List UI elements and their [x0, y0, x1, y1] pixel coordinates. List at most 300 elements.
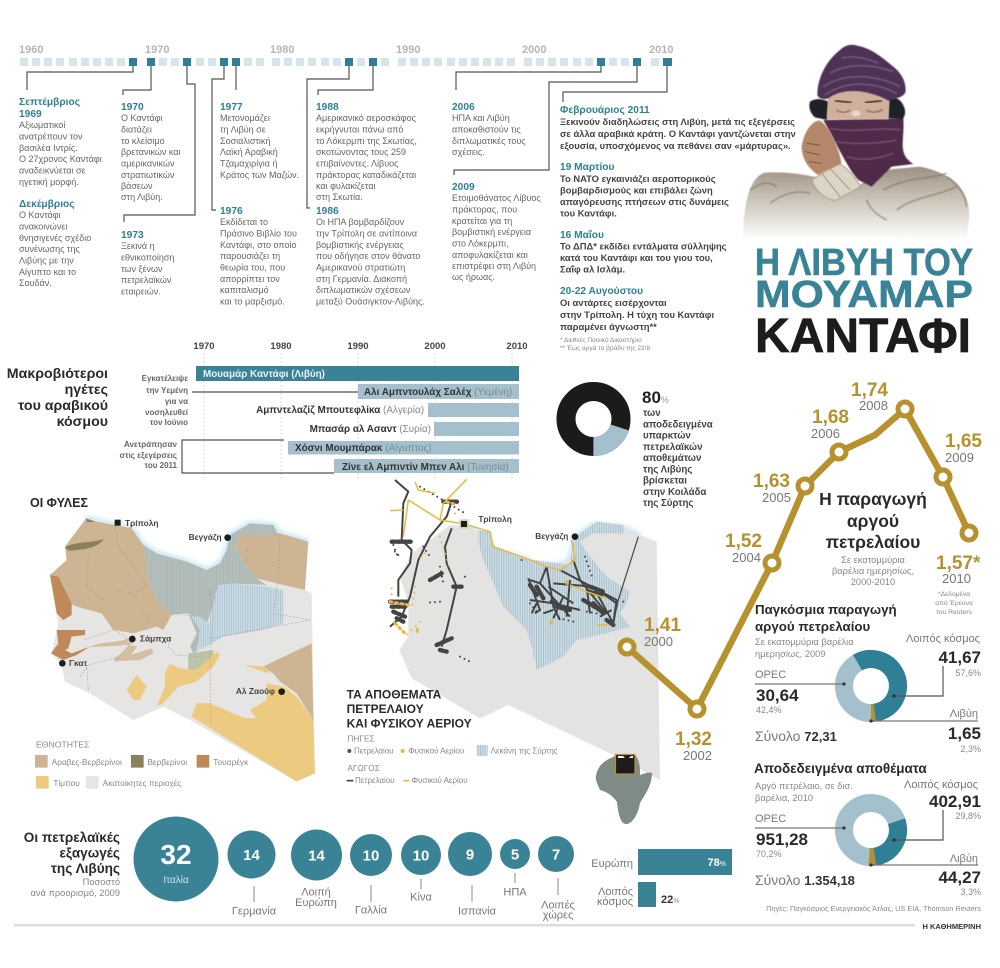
note: overthrown leaders: του 2011 [145, 461, 178, 470]
data label 2002: 1,32 [675, 729, 712, 750]
bar: Europe [591, 849, 732, 875]
production markers [620, 402, 976, 716]
Arab-Berber south-east region [263, 643, 313, 720]
timeline text: 1977: τη Λιβύη σε [220, 124, 266, 134]
timeline year labels: 1960 [19, 44, 43, 56]
bar: Gaddafi [196, 366, 519, 381]
data label 2010: από Έρευνα [935, 599, 973, 607]
timeline text: 1970 [121, 102, 180, 202]
panel: longest-serving Arab leaders [7, 341, 528, 481]
timeline text: 1977: Κράτος των Μαζών. [220, 170, 299, 180]
data label 2000: 2000 [644, 634, 673, 649]
timeline text: 1970: το κλείσιμο [121, 136, 165, 146]
bubble: Italy: Ιταλία [163, 874, 189, 886]
exports heading: Οι πετρελαϊκές [24, 830, 120, 845]
timeline text: 1986 [316, 206, 425, 306]
timeline text: 2009: ως ήρωας. [452, 272, 495, 282]
total: Σύνολο 72,31 [755, 728, 837, 744]
Libya base map [399, 525, 660, 780]
leaders heading: ηγέτες [65, 382, 108, 398]
turban [817, 45, 906, 101]
tribes legend: Τίμπου [53, 778, 80, 788]
bubble: Spain [448, 832, 497, 918]
note: Yemen leader: νοσηλευθεί [145, 408, 188, 417]
bubble: China: Κίνα [410, 892, 432, 904]
timeline text: 2011: 19 Μαρτίου [560, 162, 615, 173]
timeline text: 1973: 1973 [121, 230, 144, 241]
production subtitle: Σε εκατομμύρια [841, 555, 906, 565]
data label 2000 [644, 615, 681, 649]
title: Η ΛΙΒΥΗ ΤΟΥ [755, 242, 973, 284]
timeline text: 1988: εκρήγνυται πάνω από [316, 124, 403, 134]
bubble: other countries [538, 836, 575, 922]
leaders axis years: 2010 [506, 341, 528, 352]
bar: Mubarak: Χόσνι Μουμπάρακ (Αίγυπτος) [295, 443, 432, 454]
hand [802, 121, 842, 175]
timeline text: 1986: στη Γερμανία. Διακοπή [316, 274, 407, 284]
timeline text: 2006: 2006 [452, 102, 475, 113]
data label 2004: 2004 [732, 550, 761, 565]
tribes heading: ΟΙ ΦΥΛΕΣ [30, 496, 88, 510]
bubble: USA: 5 [511, 846, 519, 864]
production heading: πετρελαίου [826, 532, 920, 552]
callout: rest of world: Λοιπός κόσμος [906, 633, 980, 645]
exports heading: της Λιβύης [51, 861, 120, 876]
callout: Libya: 2,3% [960, 744, 981, 754]
reserves legend: Φυσικού Αερίου [408, 747, 464, 756]
donut caption: αποθεμάτων [643, 453, 701, 464]
reserves subtitle: βαρέλια, 2010 [755, 793, 813, 803]
timeline text: 2009 [452, 182, 541, 282]
bubble: Spain: 9 [466, 846, 474, 864]
hatched northern region [132, 523, 278, 653]
data label 2010: του Reuters [936, 609, 972, 616]
timeline text: 1988: πράκτορας καταδικάζεται [316, 170, 416, 180]
bar: Assad [310, 422, 519, 436]
callout: OPEC: 42,4% [756, 705, 782, 715]
timeline year labels: 2000 [522, 44, 546, 56]
callout: OPEC: 30,64 [756, 686, 799, 705]
reserves legend: ΑΓΩΓΟΣ [347, 763, 380, 773]
timeline year squares [20, 58, 659, 66]
bubble: other countries: χώρες [543, 910, 573, 922]
bar: Europe: 78% [708, 857, 726, 869]
timeline text: 2009: στο Λόκερμπι, [452, 238, 509, 248]
timeline text: 1988: Αμερικανικό αεροσκάφος [316, 113, 417, 123]
timeline text: 1986: μεταξύ Ουάσιγκτον-Λιβύης. [316, 296, 425, 306]
reserves legend: Φυσικού Αερίου [412, 776, 468, 785]
reserves legend: ΠΗΓΕΣ [347, 734, 375, 744]
timeline text: 1969: 1969 [19, 109, 42, 120]
callout: OPEC [755, 669, 846, 715]
province borders [80, 527, 310, 723]
timeline text: 1973: Ξεκινά η [121, 241, 155, 251]
bubble: Italy [134, 816, 218, 902]
cuff [812, 163, 861, 201]
timeline text: 1977 [220, 102, 299, 180]
timeline text: 1973: εθνικοποίηση [121, 252, 174, 262]
title [755, 242, 973, 363]
timeline text: 2009: αποφυλακίζεται και [452, 250, 528, 260]
bubble: Germany [228, 830, 277, 918]
timeline text: 1969: Ο 27χρονος Καντάφι [19, 154, 102, 164]
timeline text: 1976: και το μαρξισμό. [220, 296, 285, 306]
panel: proven reserves [754, 761, 981, 913]
oil field clusters [390, 487, 623, 662]
hatched south tip [188, 650, 213, 670]
bar: Europe: Ευρώπη [591, 858, 633, 870]
timeline text: 1988 [316, 102, 417, 202]
timeline text: 1976: Πράσινο Βιβλίο του [220, 228, 297, 238]
gas pipelines [390, 479, 608, 625]
leaders heading: του αραβικού [18, 398, 108, 414]
bar: Mubarak [288, 441, 519, 454]
data label 2000: 1,41 [644, 615, 681, 636]
callout: Libya: 1,65 [948, 724, 981, 743]
timeline text: 1969: ανατρέπουν τον [19, 132, 83, 142]
data label 2002 [675, 729, 712, 763]
data label 2009 [945, 431, 982, 465]
timeline text: 1986: 1986 [316, 206, 339, 217]
panel: world crude production [755, 602, 981, 754]
callout: rest of world: Λοιπός κόσμος [904, 779, 978, 791]
bar: rest of world: Λοιπός [598, 886, 633, 898]
reserves heading: ΚΑΙ ΦΥΣΙΚΟΥ ΑΕΡΙΟΥ [347, 716, 472, 730]
Arab-Berber east region [235, 533, 308, 590]
panel: oil and gas reserves map [347, 479, 660, 785]
callout: OPEC [755, 813, 846, 859]
donut caption: αποδεδειγμένα [643, 420, 713, 430]
timeline text: 2011: Σαΐφ αλ Ισλάμ. [560, 264, 625, 274]
timeline text: 2011: Ξεκινούν διαδηλώσεις στη Λιβύη, μετά τις εξεγέρσεις [560, 116, 795, 127]
timeline year labels: 2010 [649, 44, 673, 56]
donut caption: στην Κοιλάδα [643, 487, 706, 498]
timeline text: 1970: βρετανικών και [121, 147, 180, 157]
data label 2008 [851, 380, 888, 413]
timeline text: 1970: αμερικανικών [121, 158, 175, 168]
timeline axis [19, 44, 673, 222]
timeline text: 1988: σκοτώνοντας τους 259 [316, 147, 406, 157]
bar: Saleh: Αλι Αμπντουλάχ Σαλέχ (Υεμένη) [364, 387, 512, 398]
bubble: France: Γαλλία [355, 904, 388, 916]
leaders axis years: 2000 [424, 341, 446, 352]
donut caption: της Λιβύης [643, 464, 692, 476]
panel: crude oil production line chart [620, 380, 982, 763]
leaders axis years: 1990 [347, 341, 369, 352]
callout: rest of world: 57,6% [955, 668, 981, 678]
world production heading: Παγκόσμια παραγωγή [755, 602, 897, 617]
timeline text: 1977: Σοσιαλιστική [220, 136, 270, 146]
tribes legend: Ακατοίκητες περιοχές [103, 778, 181, 788]
bubble: Spain: Ισπανία [458, 906, 497, 918]
note: overthrown leaders [120, 440, 334, 473]
bubble: other countries: Λοιπές [541, 900, 575, 912]
hair [809, 97, 905, 120]
panel: oil exports bubbles [24, 816, 575, 922]
bar: rest of world [597, 882, 679, 908]
reserves heading: Αποδεδειγμένα αποθέματα [754, 761, 927, 776]
timeline text: 1976: απορρίπτει τον [220, 274, 280, 284]
reserves donut [837, 796, 905, 864]
bubble: Germany: Γερμανία [232, 906, 277, 918]
timeline connectors [27, 66, 667, 222]
timeline text: 1986: διπλωματικών σχέσεων [316, 285, 411, 295]
leaders axis years [193, 341, 528, 352]
publisher credit: Η ΚΑΘΗΜΕΡΙΝΗ [922, 922, 981, 931]
note: Yemen leader: τον Ιούνιο [150, 418, 188, 427]
timeline text: 1970: 1970 [121, 102, 144, 113]
reserves legend: Πετρελαίου [355, 776, 395, 785]
timeline text: 2011: σε άλλα αραβικά κράτη. Ο Καντάφι γαντζώνεται στην [560, 128, 796, 139]
timeline text: 2009: βομβιστική ενέργεια [452, 227, 531, 237]
donut caption: υπαρκτών [643, 430, 691, 442]
bubble: rest of Europe: Ευρώπη [295, 897, 337, 909]
panel: 80 percent donut [559, 384, 713, 509]
timeline text: 1988: το Λόκερμπι της Σκωτίας, [316, 136, 417, 146]
timeline text: 1977: 1977 [220, 102, 243, 113]
timeline text: 1969: Δεκέμβριος [19, 199, 75, 210]
tribes legend: ΕΘΝΟΤΗΤΕΣ [36, 739, 90, 749]
timeline text: 1969: ηγετική μορφή. [19, 177, 79, 187]
reserves heading: ΠΕΤΡΕΛΑΙΟΥ [347, 702, 424, 716]
timeline text: 1986: βομβιστικής ενέργειας [316, 240, 404, 250]
bar: rest of world: 22% [661, 894, 679, 906]
timeline text: 2011: Το ΔΠΔ* εκδίδει εντάλματα σύλληψης [560, 240, 727, 252]
bubble: France: 10 [363, 848, 379, 864]
bubble: rest of Europe: 14 [308, 848, 325, 864]
timeline text: 2009: πράκτορας, που [452, 204, 517, 214]
donut caption: βρίσκεται [643, 476, 687, 486]
bubble: other countries: 7 [552, 846, 560, 864]
timeline text: 1970: διατάζει [121, 124, 152, 134]
note: Yemen leader: για να [165, 397, 188, 406]
panel: tribes map [30, 496, 315, 789]
bar: Saleh [358, 384, 519, 399]
timeline text: 1969: βασιλέα Ιντρίς. [19, 143, 78, 153]
world production donut [834, 649, 908, 723]
timeline text: 1976: παρουσιάζει τη [220, 251, 280, 261]
bubble: Italy: 32 [160, 839, 192, 870]
bar: Gaddafi: Μουαμάρ Καντάφι (Λιβύη) [203, 369, 325, 380]
timeline text: 1969: θνησιγενές σχέδιο [19, 233, 91, 243]
city: Benghazi: Βεγγάζη [535, 531, 568, 541]
city: Al Zawf: Αλ Ζαούφ [236, 686, 275, 696]
note: Yemen leader [142, 374, 358, 427]
timeline text: 2011: παραμένει άγνωστη** [560, 321, 657, 332]
bar chart: Europe vs rest of world [591, 849, 732, 908]
timeline year labels: 1990 [396, 44, 420, 56]
city: Sabha: Σάμπχα [140, 634, 172, 644]
world production heading: αργού πετρελαίου [755, 619, 871, 634]
callout: rest of world [892, 633, 981, 698]
data label 2009: 2009 [945, 450, 974, 465]
timeline text: 1969: ανακοινώνει [19, 222, 67, 232]
leaders axis years: 1970 [193, 341, 215, 352]
timeline text: 2011: Το ΝΑΤΟ εγκαινιάζει αεροπορικούς [560, 173, 716, 184]
donut caption: της Σύρτης [643, 498, 693, 509]
timeline year labels: 1970 [145, 44, 169, 56]
timeline text: 2011: του Καντάφι. [560, 208, 617, 218]
total: Σύνολο 1.354,18 [755, 872, 855, 888]
city: Ghat [59, 658, 87, 668]
timeline text: 1970: στρατιωτικών [121, 170, 175, 180]
exports subtitle: Ποσοστό [83, 877, 120, 887]
bubble: China: 10 [413, 848, 429, 864]
timeline text: 1986: Οι ΗΠΑ βομβαρδίζουν [316, 217, 405, 227]
timeline text: 2009: Ετοιμοθάνατος Λίβυος [452, 193, 541, 203]
reserves legend: Λεκάνη της Σύρτης [491, 747, 558, 756]
callout: rest of world: 29,8% [955, 811, 981, 821]
data label 2010 [935, 553, 981, 616]
timeline text: 1986: την Τρίπολη σε αντίποινα [316, 228, 417, 238]
city: Tripoli: Τρίπολη [478, 514, 512, 524]
timeline text: 2009: 2009 [452, 182, 475, 193]
bubble: rest of Europe: Λοιπή [301, 886, 331, 898]
donut caption: πετρελαϊκών [643, 442, 702, 453]
city: Ghat: Γκατ [69, 658, 87, 668]
timeline text: 1969: Λιβύης με την [19, 256, 74, 266]
timeline text: 1973: πετρελαϊκών [121, 275, 172, 285]
bubble: USA: ΗΠΑ [503, 886, 527, 898]
data label 2005 [753, 471, 791, 505]
timeline text: 1969: Αίγυπτο και το [19, 267, 76, 277]
production heading: αργού [847, 511, 899, 531]
timeline year labels [19, 44, 673, 56]
Arab-Berber corridors near Sabha [88, 637, 153, 661]
Libya base map [50, 518, 315, 782]
city: Benghazi: Βεγγάζη [189, 532, 222, 542]
timeline text: 2011 [560, 105, 796, 352]
data label 2009: 1,65 [945, 431, 982, 452]
donut caption [642, 388, 713, 509]
timeline text: 1969: Ο Καντάφι [19, 210, 61, 220]
timeline text: 1988: 1988 [316, 102, 339, 113]
data label 2010: *Δεδομένα [938, 590, 970, 598]
timeline text: 2011: Οι αντάρτες εισέρχονται [560, 297, 667, 308]
note: Yemen leader: την Υεμένη [146, 386, 188, 395]
reserves legend [347, 734, 558, 785]
timeline text: 1976: καπιταλισμό [220, 285, 269, 295]
data label 2008: 2008 [859, 398, 888, 413]
data label 2008: 1,74 [851, 380, 888, 401]
photo: Gaddafi with purple turban and scarf [743, 45, 969, 240]
tribes legend: Τουαρέγκ [213, 757, 249, 767]
callout: Libya: Λιβύη [950, 853, 978, 865]
oil pipelines [390, 480, 638, 647]
bubble: France [350, 834, 392, 916]
timeline text: 2011: Φεβρουάριος 2011 [560, 105, 650, 116]
face [827, 89, 890, 119]
reserves heading: ΤΑ ΑΠΟΘΕΜΑΤΑ [347, 688, 442, 702]
timeline text: 2011: * Διεθνές Ποινικό Δικαστήριο [560, 336, 642, 344]
timeline text: 1969: Αξιωματικοί [19, 120, 65, 130]
note: Yemen leader: Εγκατέλειψε [142, 374, 188, 383]
Tuareg regions [50, 575, 90, 660]
leaders axis years: 1980 [270, 341, 292, 352]
timeline text: 2011: 16 Μαΐου [560, 229, 604, 241]
timeline text: 2006: διπλωματικές τους [452, 136, 526, 146]
timeline text: 1976: Καντάφι, στο οποίο [220, 240, 297, 250]
Berber regions [65, 518, 104, 551]
callout: rest of world: 402,91 [929, 792, 981, 811]
production subtitle: βαρέλια ημερησίως, [832, 566, 914, 576]
timeline text: 1970: στη Λιβύη. [121, 192, 163, 202]
timeline text: 2006: αποκαθιστούν τις [452, 124, 521, 134]
timeline text: 1988: επιβαίνοντες. Λίβυος [316, 158, 399, 168]
donut caption: 80% [642, 388, 669, 407]
timeline text: 2011: 20-22 Αυγούστου [560, 286, 643, 297]
timeline text: 2011: βομβαρδισμούς και επιβάλει ζώνη [560, 184, 713, 196]
timeline text: 2009: κρατείται για τη [452, 216, 512, 226]
timeline text: 1973: των ξένων [121, 264, 163, 274]
world production subtitle: Σε εκατομμύρια βαρέλια [755, 637, 854, 647]
exports subtitle: ανά προορισμό, 2009 [30, 888, 120, 898]
timeline text: 1970: Ο Καντάφι [121, 113, 163, 123]
note: overthrown leaders: στις εξεγέρσεις [120, 451, 177, 460]
bubble: rest of Europe [291, 830, 342, 909]
timeline text: 2011: εξουσία, υποσχόμενος να πεθάνει σαν «μάρτυρας». [560, 140, 791, 151]
callout: OPEC: 70,2% [756, 849, 782, 859]
Sirte basin hatch [478, 522, 630, 670]
world production subtitle: ημερησίως, 2009 [755, 649, 826, 659]
bar: Ben Ali: Ζίνε ελ Αμπιντίν Μπεν Αλι (Τυνησία) [342, 462, 509, 473]
bubble: USA [500, 839, 530, 898]
title: ΜΟΥΑΜΑΡ [755, 274, 973, 316]
leaders heading: κόσμου [57, 414, 108, 430]
timeline text: 2006: σχέσεις. [452, 147, 485, 157]
timeline text: 2009: επιστρέφει στη Λιβύη [452, 261, 536, 271]
bar: Bouteflika [256, 403, 519, 417]
data label 2002: 2002 [683, 748, 712, 763]
timeline text: 2011: κατά του Καντάφι και του γιου του, [560, 252, 713, 263]
callout: Libya [869, 853, 981, 897]
data label 2006 [811, 407, 849, 441]
coastal glow [472, 525, 640, 567]
production line [627, 409, 969, 709]
hatched Sirte region [175, 583, 283, 653]
timeline text: 1986: που οδήγησε στον θάνατο [316, 251, 420, 261]
title: ΚΑΝΤΑΦΙ [755, 310, 971, 363]
callout: OPEC: 951,28 [756, 830, 808, 849]
tribes legend [35, 739, 249, 789]
timeline text: 1969 [19, 97, 102, 288]
timeline text: 1977: Μετονομάζει [220, 113, 270, 123]
timeline text: 2006 [452, 102, 526, 157]
timeline text: 1988: στη Σκωτία. [316, 192, 363, 202]
data label 2005: 1,63 [753, 471, 790, 492]
city: Tripoli [459, 514, 512, 529]
timeline text: 1976: θεωρία του, που [220, 262, 285, 272]
data label 2010: 1,57* [936, 553, 981, 574]
callout: Libya: Λιβύη [950, 708, 978, 720]
gas field clusters [390, 502, 568, 637]
map of Africa with Libya box [596, 754, 652, 824]
coastal glow [86, 518, 308, 570]
timeline text: 1976: Εκδίδεται το [220, 217, 268, 227]
robe [743, 167, 969, 240]
icon: Libya inset [616, 754, 635, 774]
callout: Libya: 44,27 [938, 868, 981, 887]
reserves subtitle: Αργό πετρέλαιο, σε δισ. [755, 781, 853, 791]
timeline text: 1973 [121, 230, 174, 296]
city: Tripoli: Τρίπολη [125, 518, 159, 528]
timeline text: 1977: Λαϊκή Αραβική [220, 147, 278, 157]
data label 2010: 2010 [942, 571, 971, 586]
callout: Libya: 3,3% [960, 887, 981, 897]
scarf [823, 118, 913, 187]
timeline text: 1969: αναδεικνύεται σε [19, 166, 86, 176]
bubble: Germany: 14 [243, 847, 260, 864]
